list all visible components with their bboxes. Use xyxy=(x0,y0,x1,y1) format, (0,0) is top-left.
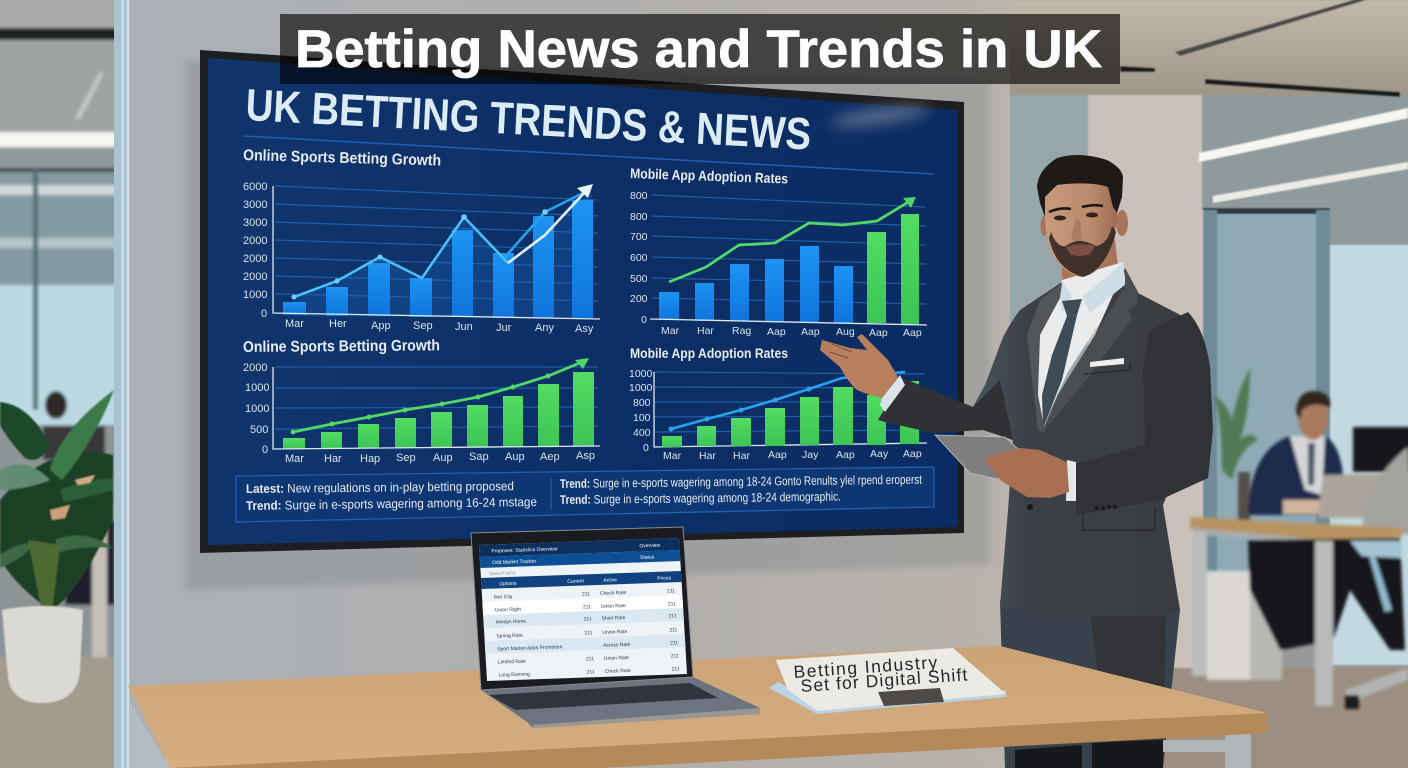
newspaper xyxy=(769,648,1006,714)
mouth xyxy=(1066,244,1095,256)
background: left office area xyxy=(0,0,120,768)
laptop screen contents: 211 xyxy=(583,616,592,622)
cuff lower hand xyxy=(1066,460,1076,501)
axis labels: Aap xyxy=(869,327,888,339)
far arm sleeve xyxy=(1072,312,1213,515)
chart heading: Mobile App Adoption Rates xyxy=(630,345,788,361)
potted plant xyxy=(0,390,114,703)
table leg under left end xyxy=(129,700,170,768)
axis labels: App xyxy=(371,320,391,332)
axis labels: 500 xyxy=(250,424,268,436)
face xyxy=(1045,178,1119,277)
display screen xyxy=(208,58,958,545)
axis labels: Aup xyxy=(433,452,453,464)
axis labels: 3000 xyxy=(243,217,267,229)
chart: online sports betting growth, bottom left xyxy=(243,337,600,465)
newspaper: Set for Digital Shift xyxy=(800,664,968,696)
axis labels xyxy=(243,362,595,465)
arrowhead xyxy=(577,184,593,198)
laptop screen contents xyxy=(479,538,687,681)
wall display xyxy=(200,50,964,553)
lapels xyxy=(1043,268,1138,432)
laptop lid xyxy=(471,527,693,690)
laptop screen contents: Iker City xyxy=(494,594,513,601)
axis labels: 700 xyxy=(630,231,648,243)
laptop screen contents: Check Rate xyxy=(605,668,631,675)
ceiling fixtures xyxy=(1175,0,1366,56)
laptop screen contents: 211 xyxy=(668,613,677,620)
laptop screen contents: 211 xyxy=(587,669,595,675)
presenter legs below table xyxy=(1015,740,1163,768)
axis labels: Aay xyxy=(870,448,889,460)
axis labels: Aap xyxy=(836,449,855,461)
laptop screen contents: Short Rate xyxy=(601,615,626,622)
raised hand xyxy=(820,334,898,398)
seated man xyxy=(1248,436,1345,515)
trend line xyxy=(669,201,910,282)
laptop screen contents: 211 xyxy=(583,604,591,610)
laptop screen contents: Limited Rate xyxy=(498,659,526,666)
desk xyxy=(1190,517,1402,541)
axis labels: 800 xyxy=(633,397,651,409)
axis labels: Aep xyxy=(540,451,560,463)
newspaper photo xyxy=(878,688,944,706)
laptop screen contents: Across Rate xyxy=(603,642,631,649)
laptop screen contents: Proposes: Statistics Overview xyxy=(491,546,558,555)
axis labels: 500 xyxy=(630,273,648,285)
chart: online sports betting growth, top left xyxy=(243,147,600,335)
plant pot xyxy=(2,606,83,703)
axis labels: Aap xyxy=(903,327,922,339)
background: right office area xyxy=(1008,0,1408,768)
axis labels: 2000 xyxy=(243,235,267,247)
axis labels: 2000 xyxy=(243,271,267,283)
axis labels: Asy xyxy=(575,323,594,335)
screen reflection xyxy=(829,101,931,131)
background: seated colleagues, desk and plant xyxy=(1190,368,1408,709)
axis labels: 0 xyxy=(262,444,268,456)
chart: mobile app adoption rates, bottom right xyxy=(629,345,927,462)
axis labels: Aup xyxy=(505,451,525,463)
axis labels xyxy=(243,181,594,335)
pocket square xyxy=(1090,358,1124,367)
axis labels xyxy=(629,368,922,462)
axis labels: Mar xyxy=(661,325,680,337)
axis labels: 800 xyxy=(630,211,648,223)
axis labels: Sap xyxy=(469,451,489,463)
axis labels: Sep xyxy=(396,452,416,464)
axis labels: 0 xyxy=(643,442,649,454)
laptop screen contents: Sport Market Apps Promotion xyxy=(497,644,563,653)
nose shadow xyxy=(1071,218,1082,242)
screen title: UK BETTING TRENDS & NEWS xyxy=(244,79,812,160)
neck xyxy=(1062,240,1120,312)
axis labels: 1000 xyxy=(245,382,269,394)
trend line xyxy=(293,362,582,432)
laptop screen contents: Prices xyxy=(657,575,672,582)
bars xyxy=(662,381,919,447)
laptop screen contents: Union Rate xyxy=(602,629,628,636)
presenter xyxy=(820,155,1213,768)
news ticker box xyxy=(236,467,934,522)
sleeve buttons xyxy=(1095,505,1117,510)
raised arm sleeve xyxy=(878,378,1013,440)
chart heading: Mobile App Adoption Rates xyxy=(630,165,789,187)
trousers xyxy=(1000,600,1180,768)
display bezel xyxy=(200,50,964,553)
axis labels: Mar xyxy=(285,453,304,465)
axis labels: 200 xyxy=(630,293,648,305)
axis labels: Jay xyxy=(802,449,819,461)
shirt xyxy=(1036,262,1126,425)
axis labels: 0 xyxy=(641,314,647,326)
axis labels: Har xyxy=(697,325,714,337)
laptop screen contents: 211 xyxy=(672,666,680,673)
axis labels: 6000 xyxy=(243,181,267,193)
wall xyxy=(130,0,1010,768)
axis labels: 800 xyxy=(630,190,648,202)
axis labels: Mar xyxy=(663,450,682,462)
laptop screen contents: 211 xyxy=(582,591,590,597)
office chair xyxy=(1350,541,1402,558)
ears xyxy=(1116,210,1128,236)
axis labels: 3000 xyxy=(243,199,267,211)
laptop screen contents: Current xyxy=(567,578,585,585)
laptop screen contents: 211 xyxy=(671,653,679,660)
axis labels: 100 xyxy=(633,412,651,424)
axis labels: Jur xyxy=(496,322,512,334)
laptop screen contents: Options xyxy=(499,581,517,587)
laptop screen contents: Odd Market Tracker xyxy=(492,559,537,566)
laptop screen contents: Overview xyxy=(639,543,661,549)
newspaper headline: Betting Industry xyxy=(793,652,938,682)
axis labels: Sep xyxy=(413,320,433,332)
axis labels: Aap xyxy=(767,326,786,338)
right ticker lines: Trend: Surge in e-sports wagering among 18-24 Gonto Renults ylel rpend eroperst xyxy=(560,473,922,491)
chart heading: Online Sports Betting Growth xyxy=(243,337,440,356)
laptop screen contents: 211 xyxy=(667,588,675,595)
jacket xyxy=(973,268,1190,616)
laptop screen contents: 211 xyxy=(670,640,679,647)
axis labels: Har xyxy=(324,453,342,465)
glass pillar edge xyxy=(114,0,130,768)
tie xyxy=(1042,299,1082,428)
laptop screen contents: Spring Rate xyxy=(496,633,523,640)
tablet hand xyxy=(984,448,1069,498)
axis labels: Any xyxy=(535,322,554,334)
axis labels: Her xyxy=(329,318,347,330)
cuff raised arm xyxy=(880,375,905,412)
axis labels: Har xyxy=(699,450,716,462)
axis labels: Aug xyxy=(836,326,855,338)
axis labels: 2000 xyxy=(243,362,267,374)
shirt collar xyxy=(1060,263,1126,313)
laptop screen contents: Always Home xyxy=(495,619,527,626)
laptop xyxy=(471,527,760,728)
axis labels: Rag xyxy=(732,325,751,337)
news ticker box: Trend: Surge in e-sports wagering among 18-24 demographic. xyxy=(560,490,841,507)
axis labels: Mar xyxy=(285,318,304,330)
arrowhead xyxy=(903,197,916,208)
jacket detail lines xyxy=(1083,362,1155,530)
wall shadow behind display xyxy=(185,60,990,590)
eyes and brows xyxy=(1049,205,1103,220)
laptop screen contents: 211 xyxy=(586,656,594,662)
axis labels: Aap xyxy=(768,449,787,461)
title text: Betting News and Trends in UK xyxy=(295,20,1102,79)
table top xyxy=(128,646,1267,768)
axis labels: Aap xyxy=(903,448,922,460)
laptop screen contents: 211 xyxy=(669,627,678,634)
tablet xyxy=(935,435,1030,479)
axis labels: Jun xyxy=(455,321,473,333)
laptop screen contents: 211 xyxy=(584,630,593,636)
axis labels: 400 xyxy=(633,427,651,439)
trend line xyxy=(294,217,508,297)
axis labels: 600 xyxy=(630,252,648,264)
hair xyxy=(1037,155,1123,217)
axis labels: 1000 xyxy=(243,289,267,301)
axis labels xyxy=(630,190,922,339)
axis labels: 1000 xyxy=(245,403,269,415)
bars xyxy=(659,246,853,323)
legs under desk xyxy=(1248,538,1405,650)
chart heading: Online Sports Betting Growth xyxy=(243,147,441,170)
bars xyxy=(283,372,594,449)
axis labels: Har xyxy=(733,450,750,462)
trend headline: Trend: Surge in e-sports wagering among 16-24 mstage xyxy=(246,495,537,513)
table xyxy=(128,646,1267,768)
laptop screen contents: Union Right xyxy=(495,607,522,614)
bars xyxy=(283,200,593,318)
title banner xyxy=(280,14,1120,84)
beard xyxy=(1049,226,1116,277)
laptop screen contents: Union Rate xyxy=(601,603,626,610)
laptop screen contents: 211 xyxy=(668,601,676,608)
laptop screen contents: Status xyxy=(640,554,655,561)
axis labels: Asp xyxy=(576,450,595,462)
laptop base xyxy=(481,677,760,728)
axis labels: Hap xyxy=(360,453,380,465)
laptop screen contents: Search bets xyxy=(489,570,516,577)
axis labels: 1000 xyxy=(629,368,653,380)
laptop screen contents: Union Rate xyxy=(604,655,629,662)
axis labels: Aap xyxy=(801,326,820,338)
chart: mobile app adoption rates, top right xyxy=(630,165,927,339)
laptop screen contents: Active xyxy=(603,577,617,584)
arrowhead xyxy=(575,358,589,369)
laptop screen contents: Long Running xyxy=(499,671,530,679)
laptop screen contents: Check Rate xyxy=(600,590,627,597)
axis labels: 2000 xyxy=(243,253,267,265)
axis labels: 1000 xyxy=(629,382,653,394)
axis labels: 0 xyxy=(261,308,267,320)
latest headline: Latest: New regulations on in-play betting proposed xyxy=(246,479,514,496)
table legs right xyxy=(1160,732,1251,768)
table front edge xyxy=(170,713,1267,768)
head xyxy=(1037,155,1128,277)
trend line xyxy=(671,372,905,429)
